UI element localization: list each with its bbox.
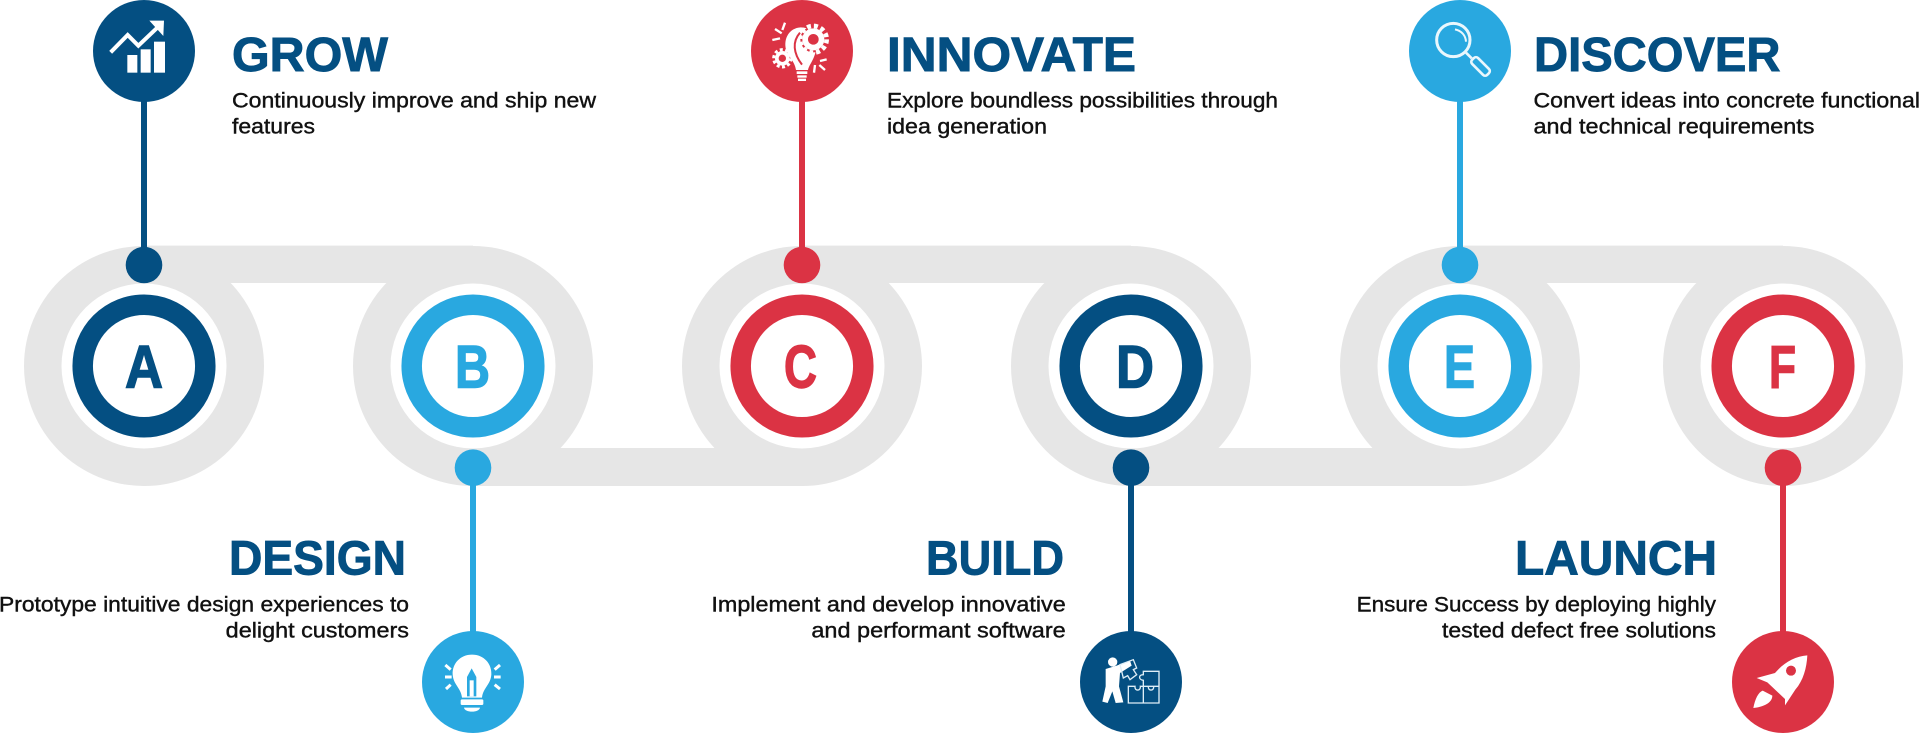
icon: light bulb with pencil	[422, 631, 524, 733]
node D	[1070, 305, 1192, 427]
icon: magnifying glass	[1409, 0, 1511, 102]
connector: build	[1113, 449, 1149, 640]
text: build description	[711, 594, 1066, 642]
node E: E	[1444, 334, 1475, 400]
text: launch description: Ensure Success by deploying highly	[1357, 594, 1717, 616]
text: grow description: Continuously improve and ship new	[232, 90, 597, 112]
connector: discover	[1442, 90, 1478, 283]
node E	[1399, 305, 1521, 427]
text: design description: Prototype intuitive design experiences to	[0, 594, 409, 616]
icon: growth chart	[93, 0, 195, 102]
text: discover description	[1534, 90, 1920, 138]
text: innovate description: Explore boundless possibilities through	[887, 90, 1278, 112]
text: design description: delight customers	[226, 620, 409, 642]
node A	[83, 305, 205, 427]
node F: F	[1769, 334, 1796, 400]
text: discover description: and technical requirements	[1534, 116, 1814, 138]
node B	[412, 305, 534, 427]
icon: idea bulb with gears	[751, 0, 853, 102]
icon: rocket	[1732, 631, 1834, 733]
heading: launch: LAUNCH	[1515, 532, 1717, 586]
text: discover description: Convert ideas into concrete functional	[1534, 90, 1920, 112]
text: innovate description	[887, 90, 1278, 138]
connector: design	[455, 449, 491, 640]
text: build description: Implement and develop innovative	[711, 594, 1066, 616]
connector: innovate	[784, 90, 820, 283]
gray winding track	[24, 246, 1903, 486]
text: innovate description: idea generation	[887, 116, 1047, 138]
text: launch description	[1357, 594, 1717, 642]
heading: discover: DISCOVER	[1534, 29, 1780, 82]
node C: C	[784, 334, 817, 400]
node C	[741, 305, 863, 427]
node A: A	[125, 334, 163, 400]
text: grow description	[232, 90, 597, 138]
text: grow description: features	[232, 116, 315, 138]
node B: B	[455, 334, 490, 400]
icon: person assembling puzzle	[1080, 631, 1182, 733]
text: launch description: tested defect free solutions	[1442, 620, 1716, 642]
heading: grow: GROW	[232, 29, 389, 82]
text: build description: and performant software	[811, 620, 1066, 642]
node D: D	[1116, 334, 1154, 400]
text: design description	[0, 594, 409, 642]
connector: grow	[126, 90, 162, 283]
heading: innovate: INNOVATE	[887, 29, 1136, 82]
node F	[1722, 305, 1844, 427]
connector: launch	[1765, 449, 1801, 640]
heading: build: BUILD	[926, 532, 1064, 586]
heading: design: DESIGN	[229, 532, 406, 586]
